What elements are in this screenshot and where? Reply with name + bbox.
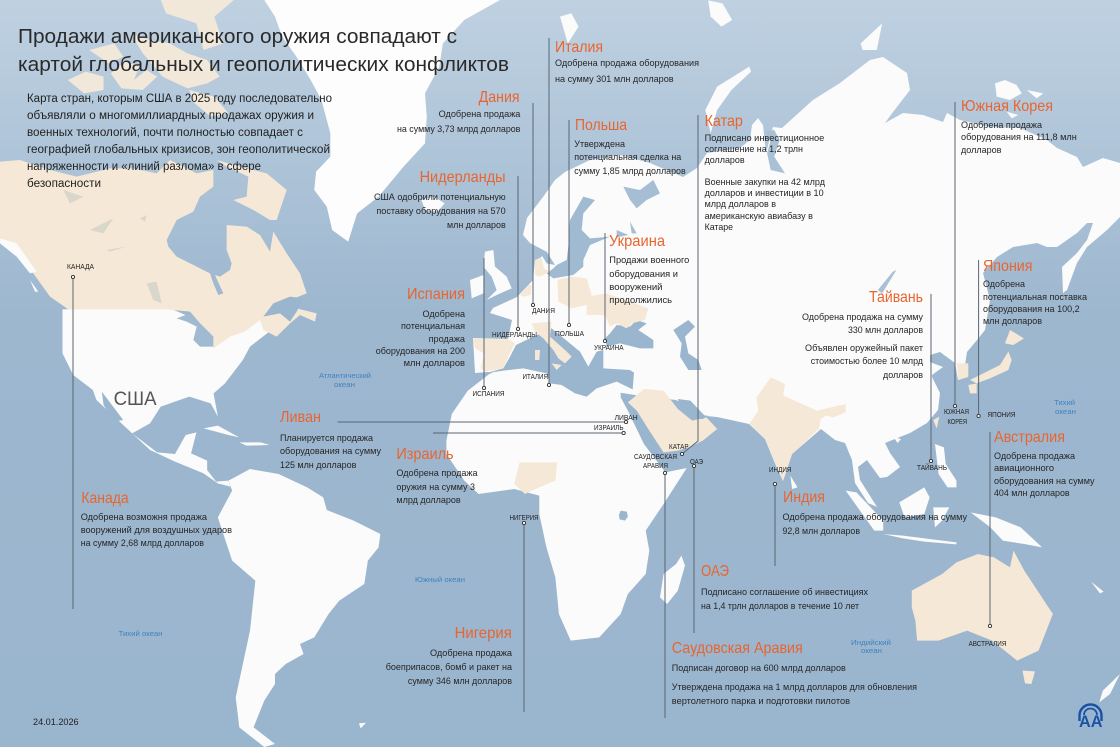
callout: Индия: 92,8 млн долларов	[782, 526, 860, 536]
ocean labels: океан	[861, 646, 882, 655]
callout: Южная Корея: оборудования на 111,8 млн	[961, 132, 1077, 142]
marker: Катар: КАТАР	[669, 444, 689, 451]
callout: Саудовская Аравия: Утверждена продажа на 1 млрд долларов для обновления	[672, 682, 917, 692]
callout: Саудовская Аравия	[672, 640, 917, 706]
callout: Нигерия: Нигерия	[455, 625, 512, 642]
callout: Катар: Военные закупки на 42 млрд	[705, 177, 826, 187]
Red Sea	[621, 397, 674, 469]
callout: ОАЭ: Подписано соглашение об инвестициях	[701, 587, 868, 597]
marker: Испания	[472, 258, 504, 398]
callout: Катар: американскую авиабазу в	[705, 211, 813, 221]
callout: Тайвань: Тайвань	[869, 289, 923, 306]
India	[749, 377, 846, 481]
marker: Нидерланды: НИДЕРЛАНДЫ	[492, 332, 537, 339]
callout: Израиль	[396, 446, 478, 505]
callout: Тайвань: стоимостью более 10 млрд	[811, 356, 924, 366]
Lakes Ladoga and Onega	[617, 222, 637, 237]
callout: Австралия: оборудования на сумму	[994, 476, 1095, 486]
landmass: Eurasia	[473, 57, 1120, 507]
ocean labels: океан	[334, 380, 355, 389]
Ireland	[470, 275, 483, 298]
callout: ОАЭ: на 1,4 трлн долларов в течение 10 лет	[701, 601, 860, 611]
callout: Дания	[397, 89, 521, 134]
Denmark	[535, 258, 550, 277]
callout: ОАЭ: ОАЭ	[701, 563, 729, 580]
Caribbean islands	[204, 426, 270, 446]
callout: Польша: потенциальная сделка на	[574, 152, 682, 162]
callout: Украина: вооружений	[609, 282, 662, 292]
Japan	[968, 330, 1024, 393]
callout: Ливан: Ливан	[280, 409, 321, 426]
Alaska panhandle	[0, 238, 37, 273]
marker: Южная Корея: КОРЕЯ	[948, 419, 967, 426]
marker: Южная Корея	[944, 102, 969, 426]
Australia	[912, 551, 1053, 661]
marker: Катар	[669, 115, 698, 456]
Tasmania	[1022, 671, 1035, 684]
callout: Испания: потенциальная	[401, 321, 465, 331]
marker: Саудовская Аравия	[634, 454, 677, 718]
callout: Израиль: оружия на сумму 3	[396, 482, 475, 492]
Vancouver Island	[30, 280, 38, 292]
callout: Нидерланды: США одобрили потенциальную	[374, 192, 506, 202]
White Sea	[623, 180, 660, 208]
callout: Испания: продажа	[429, 334, 466, 344]
Taiwan	[933, 417, 939, 428]
marker: Япония	[977, 260, 1016, 419]
callout: Испания: оборудования на 200	[376, 346, 465, 356]
Gulf of California	[102, 392, 123, 422]
callout: Австралия: 404 млн долларов	[994, 488, 1070, 498]
callout: Катар: долларов	[705, 155, 745, 165]
callout: Ливан: оборудования на сумму	[280, 446, 381, 456]
callout: Испания	[376, 286, 466, 368]
marker: Австралия	[969, 432, 1006, 648]
callout: Канада: вооружений для воздушных ударов	[81, 525, 232, 535]
callout: Тайвань	[802, 289, 924, 380]
callout: Саудовская Аравия: Подписан договор на 600 млрд долларов	[672, 663, 846, 673]
callout: Польша: Польша	[575, 117, 627, 134]
East Asia detail	[933, 330, 1024, 428]
marker: Тайвань	[917, 294, 947, 472]
intro text: объявляли о многомиллиардных продажах оружия и	[27, 110, 314, 122]
callout: Южная Корея: Одобрена продажа	[961, 120, 1043, 130]
marker: Израиль	[433, 425, 625, 435]
Lake Baikal	[878, 270, 896, 293]
callout: Польша	[574, 117, 686, 176]
Arctic islands	[68, 0, 234, 117]
ocean labels: океан	[1055, 407, 1076, 416]
marker: Дания: ДАНИЯ	[532, 308, 555, 315]
callout: Испания: Испания	[407, 286, 465, 303]
callout: Япония: оборудования на 100,2	[983, 304, 1080, 314]
callout: Катар: млрд долларов в	[705, 199, 776, 209]
South America	[218, 469, 380, 747]
marker: Канада: КАНАДА	[67, 264, 94, 271]
callout: Индия	[782, 489, 967, 536]
callout: Ливан: Планируется продажа	[280, 433, 374, 443]
callout: Япония	[983, 258, 1088, 326]
callout: Испания: млн долларов	[404, 358, 465, 368]
callout: Польша: Утверждена	[574, 139, 626, 149]
callout: Нигерия	[386, 625, 513, 686]
callout: Украина	[609, 233, 689, 305]
title: Продажи американского оружия совпадают с	[18, 26, 457, 48]
callout: Нигерия: боеприпасов, бомб и ракет на	[386, 662, 513, 672]
callout: Индия: Одобрена продажа оборудования на сумму	[782, 512, 967, 522]
callout: Польша: сумму 1,85 млрд долларов	[574, 166, 686, 176]
Europe detail	[470, 180, 702, 397]
callout: ОАЭ	[701, 563, 868, 611]
Black Sea	[605, 320, 653, 348]
ocean labels: Тихий	[1054, 398, 1075, 407]
Canadian lakes	[63, 190, 162, 303]
Baffin Island	[217, 160, 287, 220]
Canada	[0, 160, 317, 348]
callout: Нидерланды: поставку оборудования на 570	[376, 206, 506, 216]
callout: Украина: продолжились	[609, 295, 672, 305]
callout: Южная Корея: Южная Корея	[961, 98, 1053, 115]
callout: Катар: соглашение на 1,2 трлн	[705, 144, 803, 154]
callout: Дания: Одобрена продажа	[439, 109, 521, 119]
callout: Тайвань: 330 млн долларов	[848, 325, 923, 335]
Great Britain	[483, 250, 512, 300]
Mediterranean Sea	[485, 328, 634, 397]
callout: Италия: Италия	[555, 39, 603, 56]
callout: Украина: Продажи военного	[609, 255, 689, 265]
marker: Ливан	[338, 415, 638, 424]
Spain	[473, 338, 515, 372]
callout: Австралия: авиационного	[994, 463, 1054, 473]
callout: Япония: потенциальная поставка	[983, 292, 1088, 302]
Greenland	[264, 0, 500, 242]
marker: Украина	[594, 233, 624, 352]
marker: Испания: ИСПАНИЯ	[472, 391, 504, 398]
Nigeria	[514, 462, 557, 494]
callout: Япония: млн долларов	[983, 316, 1042, 326]
marker: Индия: ИНДИЯ	[769, 467, 791, 474]
intro text: военных технологий, почти полностью совпадает с	[27, 127, 303, 139]
Sicily and Sardinia	[535, 350, 562, 370]
USA label: США	[114, 389, 157, 410]
callout: Израиль: Израиль	[396, 446, 454, 463]
marker: Украина: УКРАИНА	[594, 345, 624, 352]
marker: Нидерланды	[492, 176, 537, 339]
callout: Украина: оборудования и	[609, 269, 678, 279]
callout: Ливан	[280, 409, 381, 470]
callout: Канада: Канада	[81, 490, 129, 507]
marker: Саудовская Аравия: АРАВИЯ	[643, 463, 668, 470]
marker: ОАЭ: ОАЭ	[690, 459, 703, 466]
ocean labels: Атлантический	[319, 371, 371, 380]
callout: Южная Корея: долларов	[961, 145, 1002, 155]
callout: Япония: Одобрена	[983, 279, 1026, 289]
callout: Саудовская Аравия: Саудовская Аравия	[672, 640, 803, 657]
callout: Канада: на сумму 2,68 млрд долларов	[81, 538, 204, 548]
Gulf of Ob	[765, 130, 785, 173]
Poland	[557, 277, 592, 308]
callout: Израиль: млрд долларов	[396, 495, 461, 505]
marker: Италия	[522, 38, 551, 387]
marker: Нигерия	[510, 515, 539, 712]
USA and Central America	[62, 307, 271, 487]
intro text: Карта стран, которым США в 2025 году последовательно	[27, 93, 332, 105]
Saudi Arabia and Gulf states	[628, 389, 717, 452]
callout: Канада	[81, 490, 232, 548]
callout: Испания: Одобрена	[422, 309, 466, 319]
Caspian Sea	[673, 320, 702, 370]
callout: Катар: Подписано инвестиционное	[705, 133, 824, 143]
callout: Нигерия: Одобрена продажа	[430, 648, 513, 658]
marker: Индия	[769, 467, 791, 566]
Siberian Arctic islands	[995, 80, 1043, 118]
ocean labels: Индийский	[851, 638, 891, 647]
callout: Тайвань: Одобрена продажа на сумму	[802, 312, 923, 322]
callout: Израиль: Одобрена продажа	[396, 468, 478, 478]
Persian Gulf	[678, 399, 708, 419]
Italy	[532, 322, 572, 363]
marker: Польша: ПОЛЬША	[555, 331, 584, 338]
marker: ОАЭ	[690, 459, 703, 633]
Lake Victoria	[619, 511, 628, 521]
callout: Тайвань: Объявлен оружейный пакет	[805, 343, 924, 353]
callout: Катар: Катар	[705, 113, 743, 130]
callout: Италия	[555, 39, 699, 84]
callout: Австралия	[994, 429, 1095, 498]
callout: Саудовская Аравия: вертолетного парка и подготовки пилотов	[672, 696, 850, 706]
callout: Катар	[705, 113, 826, 232]
intro text: напряженности и «линий разлома» в сфере	[27, 161, 261, 173]
logo: Anadolu Agency: AA	[1079, 712, 1102, 731]
marker: Нигерия: НИГЕРИЯ	[510, 515, 539, 522]
marker: Япония: ЯПОНИЯ	[988, 412, 1016, 419]
callout: Нидерланды: млн долларов	[447, 220, 506, 230]
title: картой глобальных и геополитических конфликтов	[18, 54, 509, 76]
title	[18, 26, 509, 76]
callout: Нидерланды	[374, 169, 506, 230]
callout: Южная Корея	[961, 98, 1077, 155]
callout: Нигерия: сумму 346 млн долларов	[408, 676, 512, 686]
marker: Тайвань: ТАЙВАНЬ	[917, 463, 947, 472]
Iceland	[421, 197, 445, 212]
callout: Япония: Япония	[983, 258, 1032, 275]
marker: Италия: ИТАЛИЯ	[522, 374, 548, 381]
callout: Ливан: 125 млн долларов	[280, 460, 357, 470]
Sri Lanka, Madagascar, Indonesia and Pacific islands	[359, 437, 1120, 728]
Netherlands	[520, 285, 532, 297]
marker: Канада	[67, 264, 94, 609]
callout: Канада: Одобрена возможня продажа	[81, 512, 208, 522]
ocean labels	[119, 371, 1076, 655]
marker: Ливан: ЛИВАН	[615, 415, 638, 422]
intro text: безопасности	[27, 178, 101, 190]
logo: Anadolu Agency	[1079, 704, 1102, 731]
date: 24.01.2026	[33, 717, 79, 728]
intro text	[27, 93, 332, 190]
callout: Италия: на сумму 301 млн долларов	[555, 74, 674, 84]
callout: Тайвань: долларов	[883, 370, 923, 380]
callout: Дания: на сумму 3,73 млрд долларов	[397, 124, 521, 134]
callout: Украина: Украина	[609, 233, 665, 250]
South Korea	[957, 363, 968, 380]
Arctic islands of Russia	[560, 0, 882, 133]
intro text: географией глобальных кризисов, зон геополитической	[27, 144, 330, 156]
callout: Катар: Катаре	[705, 222, 733, 232]
ocean labels: Тихий океан	[119, 629, 163, 638]
Ukraine	[587, 293, 648, 328]
ocean labels: Южный океан	[415, 575, 465, 584]
callout: Дания: Дания	[479, 89, 520, 106]
marker: Южная Корея: ЮЖНАЯ	[944, 409, 969, 416]
marker: Саудовская Аравия: САУДОВСКАЯ	[634, 454, 677, 461]
marker: Польша	[555, 120, 584, 338]
callout: Нидерланды: Нидерланды	[420, 169, 506, 186]
Gulf of St Lawrence	[263, 297, 303, 322]
Great Lakes	[177, 313, 213, 347]
callout: Австралия: Одобрена продажа	[994, 451, 1076, 461]
marker: Израиль: ИЗРАИЛЬ	[594, 425, 624, 432]
callout: Индия: Индия	[783, 489, 825, 506]
callout: Италия: Одобрена продажа оборудования	[555, 58, 699, 68]
Baltic Sea	[547, 197, 610, 278]
callout: Катар: долларов и инвестиции в 10	[705, 188, 824, 198]
marker: Австралия: АВСТРАЛИЯ	[969, 641, 1006, 648]
Africa	[446, 370, 687, 641]
callout: Австралия: Австралия	[994, 429, 1065, 446]
Kattegat	[542, 252, 555, 265]
marker: Дания	[531, 103, 555, 315]
Canada detail	[0, 160, 317, 348]
